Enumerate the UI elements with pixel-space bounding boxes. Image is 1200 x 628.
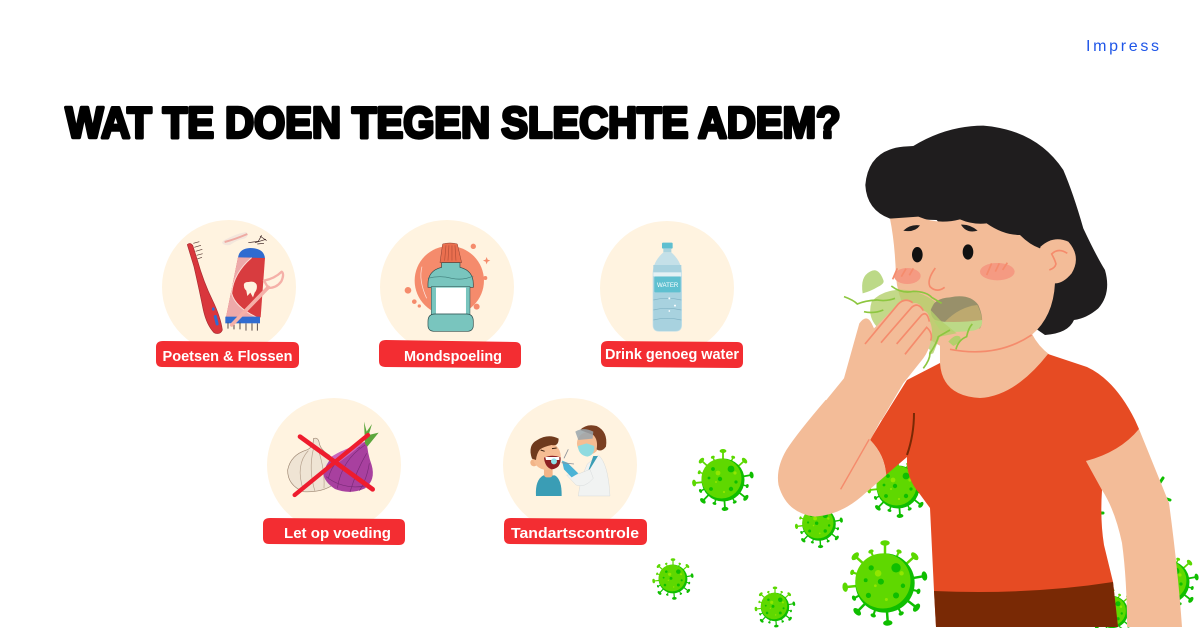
finger lines — [865, 300, 931, 354]
label pill — [379, 340, 521, 368]
right arm — [1086, 429, 1182, 627]
icon: water bottle — [653, 243, 682, 332]
eyes — [912, 247, 923, 262]
label pill — [156, 341, 299, 368]
hair back — [865, 126, 1107, 335]
bad breath cloud — [870, 290, 957, 354]
ear — [1030, 239, 1076, 283]
icon: mouthwash bottle — [405, 243, 490, 331]
shirt crease — [907, 413, 914, 455]
virus — [795, 500, 843, 548]
jaw line — [950, 335, 1032, 352]
head — [844, 217, 1076, 368]
label text: Mondspoeling — [404, 348, 502, 365]
label text: Let op voeding — [284, 525, 391, 542]
breath squiggles — [844, 286, 972, 368]
label pill — [504, 518, 647, 545]
icon circle — [162, 220, 296, 354]
item: Let op voeding — [263, 398, 405, 545]
eyebrows — [903, 225, 920, 231]
icon circle — [380, 220, 514, 354]
woman covering her mouth — [778, 126, 1182, 627]
item: Tandartscontrole — [503, 398, 647, 545]
label text: Poetsen & Flossen — [162, 348, 292, 365]
hand and forearm — [778, 400, 892, 517]
item: Mondspoeling — [379, 220, 521, 368]
viruses — [652, 449, 1199, 628]
neck — [940, 333, 1050, 407]
brand: Impress: Impress — [1086, 38, 1159, 55]
cheeks — [894, 268, 921, 284]
nose — [929, 268, 945, 290]
icon: toothbrush, toothpaste and floss — [187, 232, 283, 334]
icon circle — [600, 221, 734, 355]
label text: Tandartscontrole — [511, 525, 639, 542]
label pill — [263, 518, 405, 545]
shirt — [870, 354, 1139, 627]
item: Poetsen & Flossen — [156, 220, 299, 368]
virus — [754, 587, 796, 628]
label text: Drink genoeg water — [605, 346, 739, 363]
virus — [1089, 589, 1135, 628]
virus — [652, 558, 694, 600]
virus spikes behind arm — [1100, 478, 1170, 513]
virus — [1137, 551, 1199, 613]
open mouth — [931, 296, 982, 328]
virus — [867, 456, 929, 518]
skirt — [934, 582, 1118, 627]
virus — [692, 449, 754, 511]
icon: water bottle: WATER — [657, 282, 678, 289]
icon: dentist and patient — [530, 425, 610, 496]
item: Drink genoeg water — [600, 221, 743, 368]
icon: crossed out garlic and onion — [288, 422, 379, 495]
virus — [842, 540, 928, 626]
title: WAT TE DOEN TEGEN SLECHTE ADEM? — [66, 98, 840, 148]
label pill — [601, 341, 743, 368]
icon circle — [503, 398, 637, 532]
icon circle — [267, 398, 401, 532]
